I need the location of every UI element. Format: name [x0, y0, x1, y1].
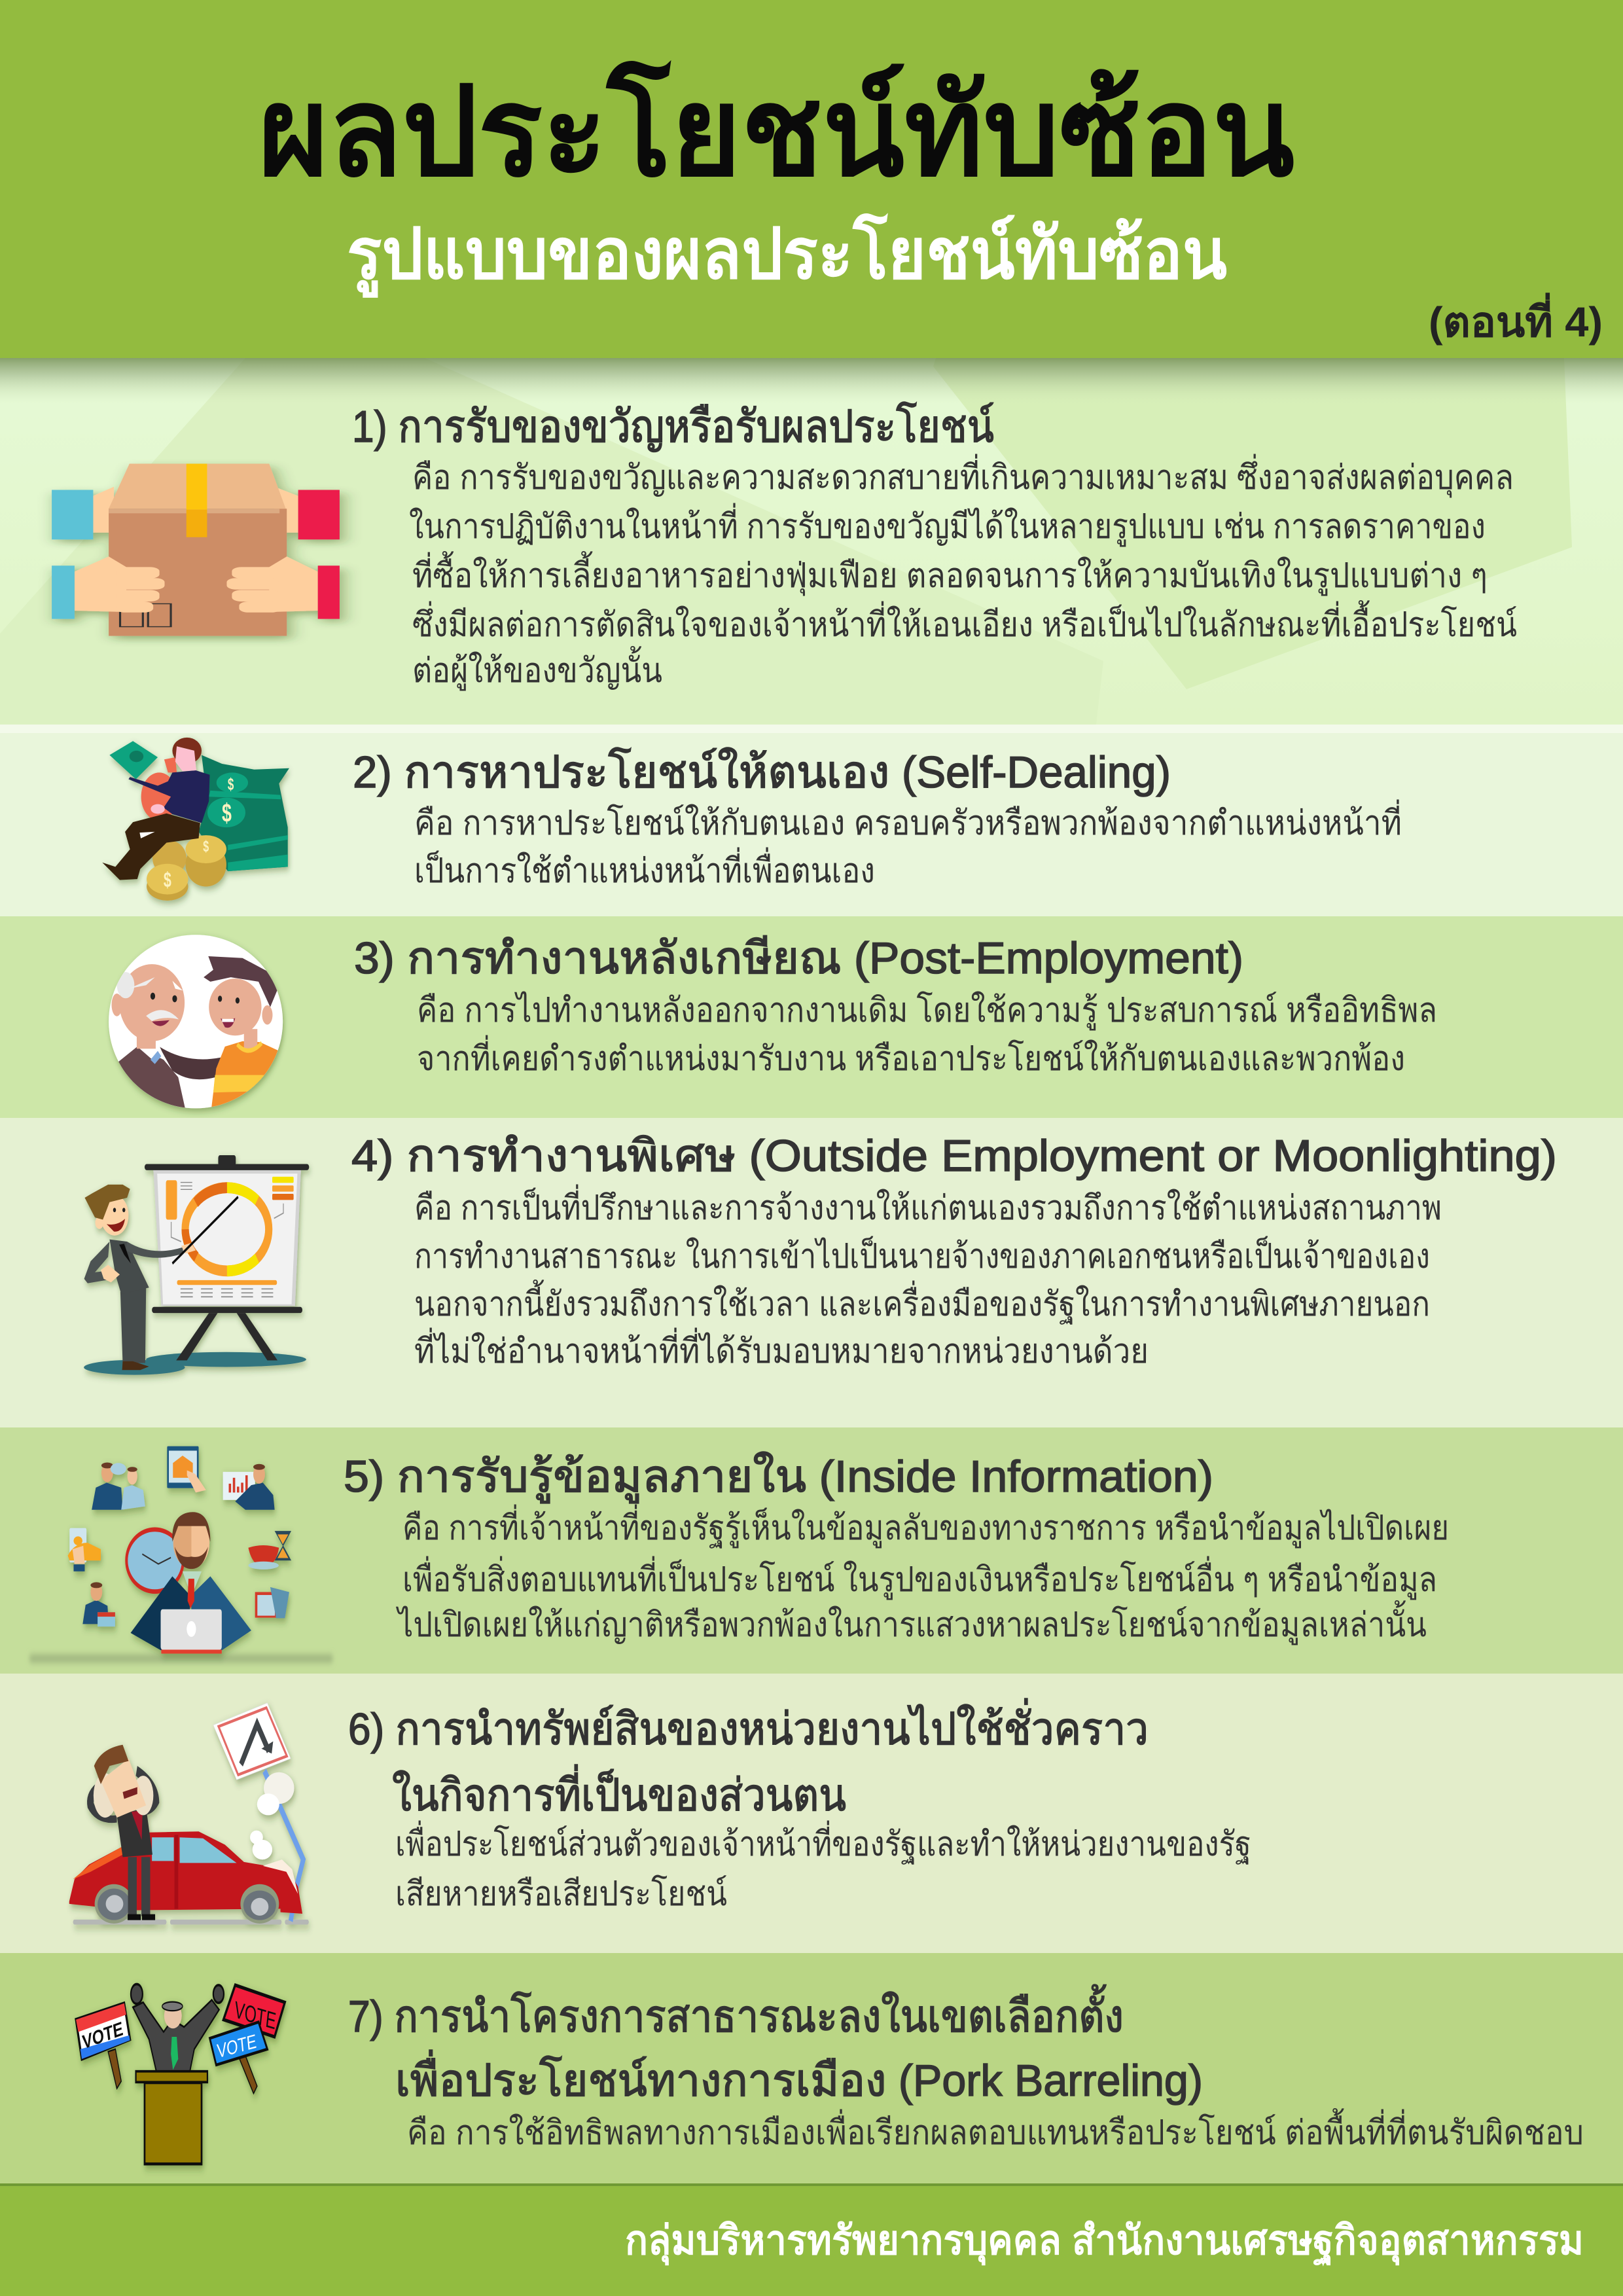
- text block: item 5 description: คือ การที่เจ้าหน้าที่ของรัฐรู้เห็นในข้อมูลลับของทางราชการ หรือนำข้อมูลไปเปิดเผย: [402, 1504, 1449, 1549]
- heading: item 6: ในกิจการที่เป็นของส่วนตน: [392, 1765, 846, 1820]
- text block: item 5 description: ไปเปิดเผยให้แก่ญาติหรือพวกพ้องในการแสวงหาผลประโยชน์จากข้อมูลเหล่านั้น: [395, 1600, 1427, 1645]
- heading: item 5: 5) การรับรู้ข้อมูลภายใน (Inside Information): [344, 1451, 1213, 1503]
- text block: item 5 description: [395, 1504, 1449, 1645]
- heading: item 7: [348, 1984, 1203, 2106]
- text block: item 4 description: การทำงานสาธารณะ ในการเข้าไปเป็นนายจ้างของภาคเอกชนหรือเป็นเจ้าของเอง: [414, 1236, 1430, 1276]
- text block: item 1 description: [409, 454, 1517, 691]
- icon: presenter pointing at a chart board: [84, 1155, 309, 1375]
- text block: item 1 description: ในการปฏิบัติงานในหน้าที่ การรับของขวัญมีได้ในหลายรูปแบบ เช่น การลดราคาของ: [409, 503, 1486, 547]
- text block: item 3 description: คือ การไปทำงานหลังออกจากงานเดิม โดยใช้ความรู้ ประสบการณ์ หรืออิทธิพล: [417, 991, 1437, 1031]
- icon: man sitting on money and coins: $: [222, 798, 232, 828]
- text block: item 4 description: นอกจากนี้ยังรวมถึงการใช้เวลา และเครื่องมือของรัฐในการทำงานพิเศษภายนอก: [414, 1280, 1430, 1324]
- icon: politician at podium with vote signs: VOTE: [216, 2030, 257, 2062]
- panel: section 3 post-employment: [0, 916, 1623, 1118]
- icon: politician at podium with vote signs: [76, 1984, 285, 2164]
- subtitle: รูปแบบของผลประโยชน์ทับซ้อน: [347, 213, 1227, 298]
- text block: item 2 description: เป็นการใช้ตำแหน่งหน้าที่เพื่อตนเอง: [414, 847, 875, 890]
- text block: item 2 description: คือ การหาประโยชน์ให้กับตนเอง ครอบครัวหรือพวกพ้องจากตำแหน่งหน้าที่: [414, 799, 1402, 842]
- episode label: (ตอนที่ 4): [1429, 293, 1603, 346]
- icon: man sitting on money and coins: $: [228, 775, 234, 794]
- panel: section 5 inside information: [0, 1427, 1623, 1674]
- panel: header: [0, 0, 1623, 358]
- text block: item 1 description: คือ การรับของขวัญและความสะดวกสบายที่เกินความเหมาะสม ซึ่งอาจส่งผลต่อบุคคล: [412, 454, 1514, 498]
- panel: section 4 outside employment: [0, 1118, 1623, 1427]
- text block: item 3 description: จากที่เคยดำรงตำแหน่งมารับงาน หรือเอาประโยชน์ให้กับตนเองและพวกพ้อง: [417, 1035, 1405, 1078]
- heading: item 7: 7) การนำโครงการสาธารณะลงในเขตเลือกตั้ง: [348, 1984, 1124, 2041]
- text block: item 4 description: [414, 1184, 1442, 1371]
- icon: man beside a crashed car and road sign: [69, 1703, 309, 1924]
- panel: section 6 misuse of assets: [0, 1674, 1623, 1953]
- panel: section 2 self-dealing: [0, 725, 1623, 916]
- text block: item 5 description: เพื่อรับสิ่งตอบแทนที่เป็นประโยชน์ ในรูปของเงินหรือประโยชน์อื่น ๆ หรือนำข้อมูล: [402, 1556, 1437, 1600]
- heading: item 6: [348, 1698, 1149, 1820]
- text block: item 6 description: เพื่อประโยชน์ส่วนตัวของเจ้าหน้าที่ของรัฐและทำให้หน่วยงานของรัฐ: [395, 1820, 1251, 1864]
- text block: item 6 description: [395, 1820, 1251, 1913]
- icon: politician at podium with vote signs: VOTE: [81, 2018, 124, 2053]
- icon: old man and young man portrait: [109, 935, 283, 1112]
- heading: item 7: เพื่อประโยชน์ทางการเมือง (Pork Barreling): [395, 2050, 1203, 2106]
- text block: item 2 description: [414, 799, 1402, 890]
- panel: footer: [0, 2183, 1623, 2296]
- text block: item 1 description: ซึ่งมีผลต่อการตัดสินใจของเจ้าหน้าที่ให้เอนเอียง หรือเป็นไปในลักษณะที่เอื้อประโยชน์: [412, 600, 1517, 644]
- panel: section 7 pork barreling: [0, 1953, 1623, 2183]
- icon: hands holding a parcel: [52, 464, 340, 636]
- text block: item 3 description: [417, 991, 1437, 1078]
- icon: man sitting on money and coins: [102, 738, 289, 901]
- heading: item 6: 6) การนำทรัพย์สินของหน่วยงานไปใช้ชั่วคราว: [348, 1698, 1149, 1754]
- text block: item 1 description: ที่ซื้อให้การเลี้ยงอาหารอย่างฟุ่มเฟือย ตลอดจนการให้ความบันเทิงในรูปแบบต่าง ๆ: [412, 551, 1488, 596]
- text block: item 1 description: ต่อผู้ให้ของขวัญนั้น: [412, 646, 662, 691]
- text block: item 4 description: ที่ไม่ใช่อำนาจหน้าที่ที่ได้รับมอบหมายจากหน่วยงานด้วย: [414, 1327, 1149, 1371]
- text block: item 6 description: เสียหายหรือเสียประโยชน์: [395, 1874, 727, 1913]
- text block: item 4 description: คือ การเป็นที่ปรึกษาและการจ้างงานให้แก่ตนเองรวมถึงการใช้ตำแหน่งสถานภาพ: [414, 1184, 1442, 1227]
- panel: section 1 gift background and content: [0, 358, 1623, 725]
- heading: item 1: 1) การรับของขวัญหรือรับผลประโยชน์: [352, 401, 994, 452]
- icon: businessman with laptop surrounded by small icons: [29, 1446, 333, 1662]
- title: ผลประโยชน์ทับซ้อน: [259, 60, 1294, 202]
- icon: man sitting on money and coins: $: [164, 868, 171, 891]
- footer organisation credit: กลุ่มบริหารทรัพยากรบุคคล สำนักงานเศรษฐกิจอุตสาหกรรม: [625, 2218, 1584, 2267]
- heading: item 3: 3) การทำงานหลังเกษียณ (Post-Employment): [354, 933, 1243, 983]
- icon: politician at podium with vote signs: VOTE: [233, 1996, 277, 2035]
- heading: item 2: 2) การหาประโยชน์ให้ตนเอง (Self-Dealing): [353, 747, 1171, 797]
- icon: man sitting on money and coins: $: [203, 838, 209, 855]
- heading: item 4: 4) การทำงานพิเศษ (Outside Employment or Moonlighting): [351, 1131, 1557, 1181]
